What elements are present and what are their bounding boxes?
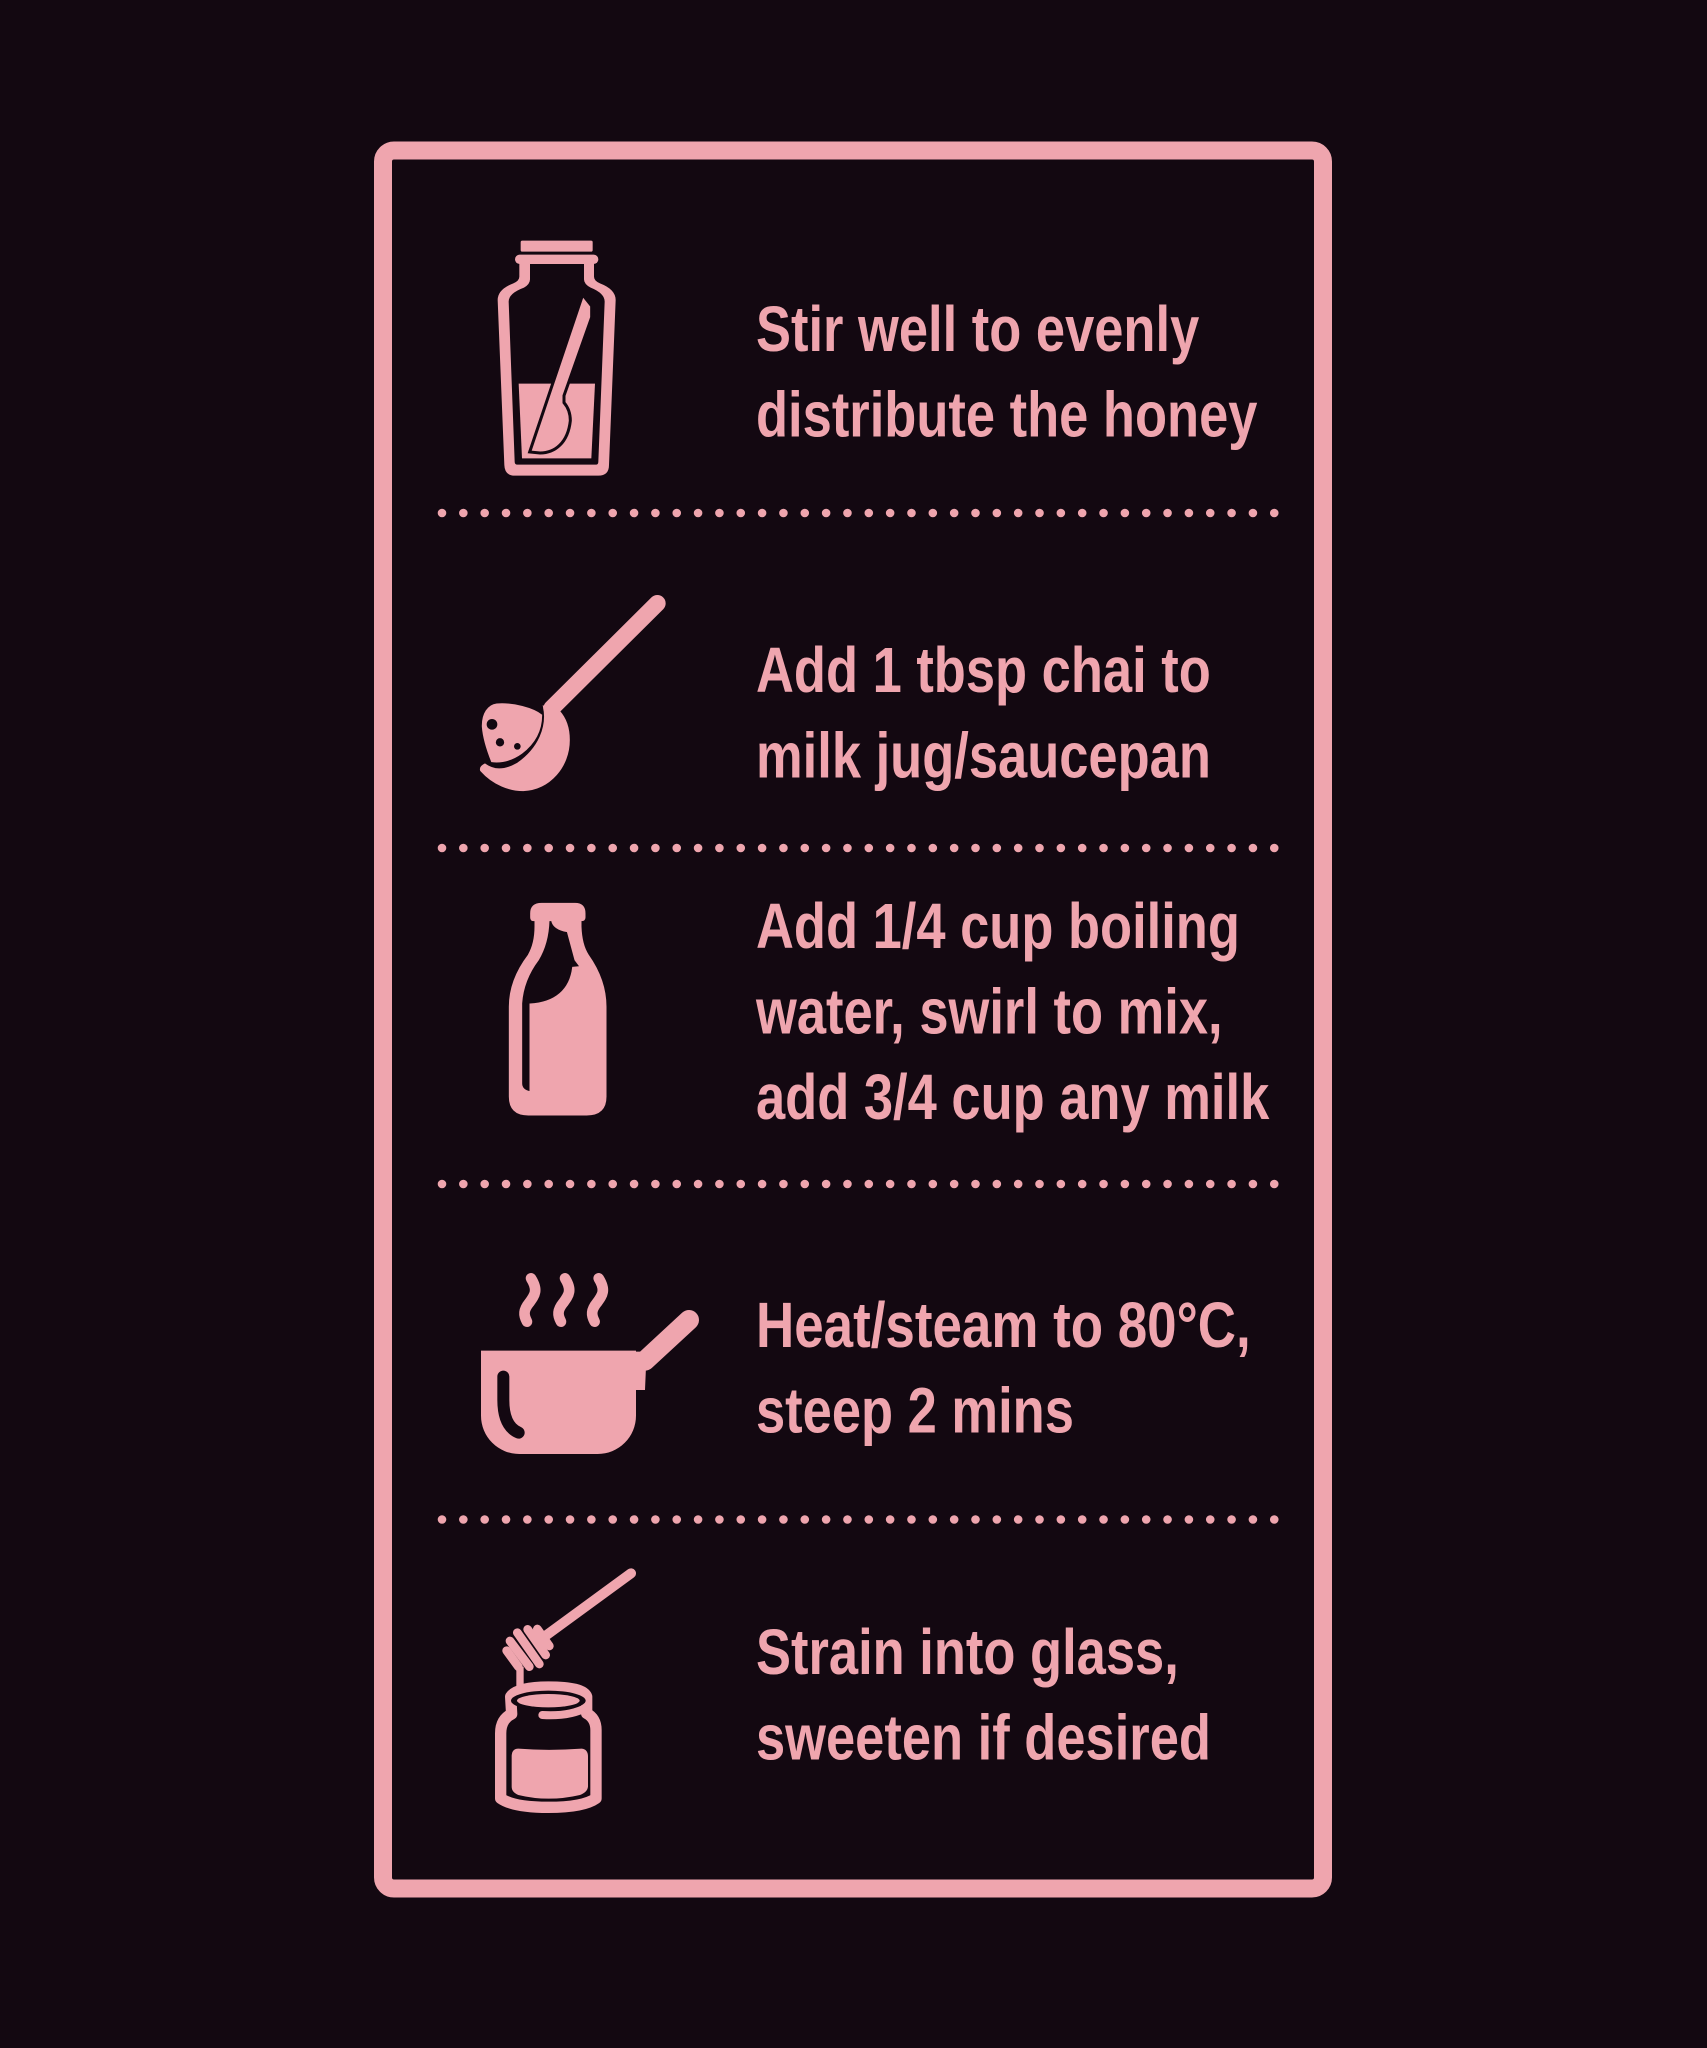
- icon: milk bottle: [509, 903, 606, 1115]
- icon: steaming saucepan: [481, 1278, 689, 1454]
- text: heat and steep: steep 2 mins: [756, 1376, 1074, 1447]
- text: add chai: Add 1 tbsp chai to: [756, 635, 1211, 706]
- text: heat and steep: Heat/steam to 80°C,: [756, 1290, 1251, 1361]
- text: add chai: [756, 635, 1211, 792]
- text: add water and milk: Add 1/4 cup boiling: [756, 891, 1240, 962]
- icon: spoon with chai powder: [480, 603, 657, 791]
- text: stir well: Stir well to evenly: [756, 294, 1200, 365]
- panel: recipe frame: [383, 150, 1323, 1888]
- text: add water and milk: add 3/4 cup any milk: [756, 1062, 1270, 1133]
- text: stir well: [756, 294, 1258, 451]
- text: add water and milk: water, swirl to mix,: [755, 977, 1223, 1048]
- text: heat and steep: [756, 1290, 1251, 1447]
- text: strain and sweeten: [756, 1617, 1211, 1774]
- text: add water and milk: [755, 891, 1270, 1133]
- text: stir well: distribute the honey: [756, 380, 1258, 451]
- icon: honey dipper and jar: [501, 1573, 631, 1807]
- text: strain and sweeten: Strain into glass,: [756, 1617, 1179, 1688]
- text: strain and sweeten: sweeten if desired: [756, 1703, 1211, 1774]
- text: add chai: milk jug/saucepan: [756, 721, 1211, 792]
- icon: jar with spoon: [498, 241, 616, 476]
